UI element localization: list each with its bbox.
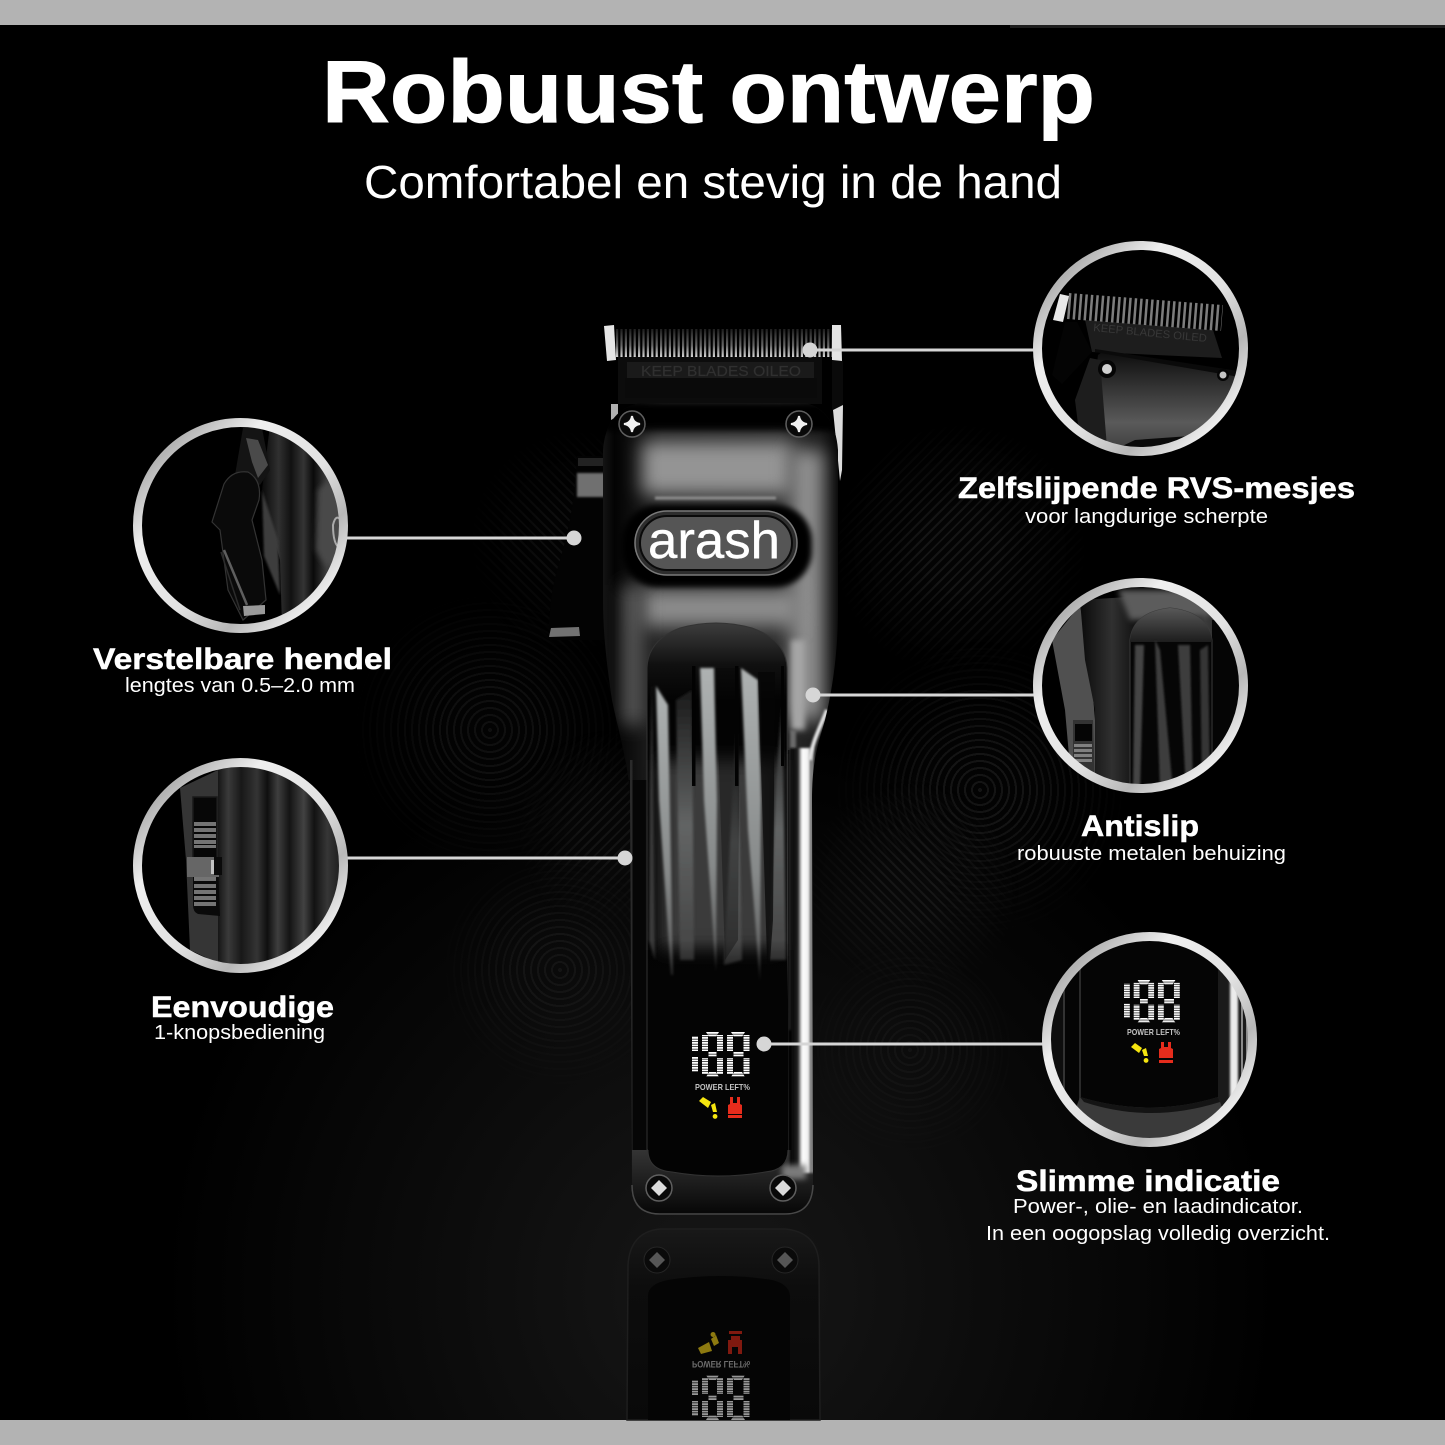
callout lines	[347, 350, 1044, 1044]
logo text: arash	[648, 512, 780, 570]
blade assembly	[604, 325, 843, 481]
subtitle: Comfortabel en stevig in de hand	[364, 156, 1062, 208]
feature text: smart display	[986, 1165, 1330, 1245]
callout dot: blades	[802, 342, 818, 358]
charge icon	[728, 1097, 742, 1118]
feature text: lever: lengtes van 0.5–2.0 mm	[125, 675, 355, 697]
adjustable lever	[549, 456, 606, 640]
callout dot: lever	[566, 530, 582, 546]
feature text: anti-slip	[1017, 810, 1286, 865]
detail circle: anti-slip	[1038, 582, 1244, 800]
grip panel with flutes	[647, 623, 788, 1176]
feature text: switch: 1-knopsbediening	[154, 1022, 325, 1044]
product: clipper	[549, 325, 843, 1215]
feature text: lever: Verstelbare hendel	[93, 643, 392, 676]
feature text: switch: Eenvoudige	[151, 991, 334, 1024]
callout dot: grip	[806, 688, 820, 702]
feature text: anti-slip: robuuste metalen behuizing	[1017, 843, 1286, 865]
clipper body	[603, 403, 838, 1215]
callout dot: display	[756, 1036, 772, 1052]
detail circle: lever	[138, 422, 345, 628]
oil icon	[699, 1097, 717, 1119]
feature text: smart display: In een oogopslag volledig overzicht.	[986, 1223, 1330, 1245]
detail circle: switch	[138, 762, 348, 972]
feature text: switch	[151, 991, 334, 1044]
screws	[619, 411, 812, 1201]
detail circle: smart display: POWER LEFT%	[1127, 1027, 1180, 1037]
callout dot: switch	[618, 850, 632, 866]
detail circle: blades	[1038, 246, 1250, 470]
product reflection	[627, 1229, 820, 1420]
bottom bar	[0, 1420, 1445, 1445]
feature text: smart display: Power-, olie- en laadindicator.	[1013, 1196, 1303, 1218]
feature text: smart display: Slimme indicatie	[1016, 1165, 1280, 1198]
detail circle: smart display	[1045, 935, 1252, 1150]
feature text: lever	[93, 643, 392, 697]
product reflection: POWER LEFT%	[692, 1359, 750, 1369]
title: Robuust ontwerp	[322, 42, 1095, 141]
LED display	[692, 1032, 750, 1119]
feature text: blades: Zelfslijpende RVS-mesjes	[958, 472, 1355, 505]
feature text: anti-slip: Antislip	[1081, 810, 1199, 843]
logo plate	[635, 511, 797, 575]
feature text: blades	[958, 472, 1355, 528]
feature text: blades: voor langdurige scherpte	[1025, 506, 1268, 528]
top bar	[0, 0, 1445, 25]
display caption: POWER LEFT%	[695, 1082, 750, 1092]
blade label text: KEEP BLADES OILEO	[641, 364, 801, 380]
detail circle: blades: KEEP BLADES OILED	[1093, 322, 1207, 345]
